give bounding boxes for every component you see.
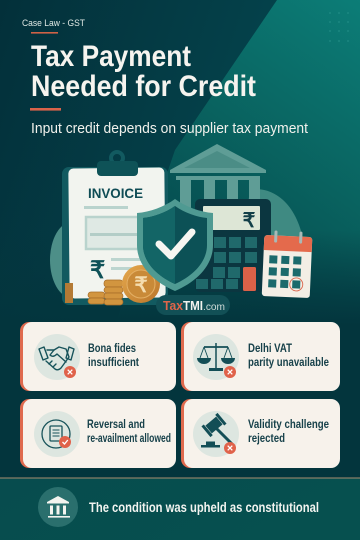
card: bona fides [20,322,176,391]
icon: clipboard invoice [62,152,168,305]
logo pill: TMI [183,299,203,313]
icon: calendar [262,230,313,298]
logo pill [156,295,230,315]
backdrop blobs [50,189,306,298]
title: Needed for Credit [31,70,256,103]
icon: clipboard invoice: ₹ [90,257,105,284]
icon: shield with check [137,199,213,291]
card text [248,419,329,445]
icon: clipboard invoice: INVOICE [88,186,143,201]
card text: re-availment allowed [87,433,171,445]
footer band [0,478,360,540]
card text: parity unavailable [248,357,329,369]
card text: Delhi VAT [248,343,292,355]
card text [87,419,171,445]
footer text: The condition was upheld as constitutional [89,500,319,515]
icon: gavel [193,411,239,457]
card text: Bona fides [88,343,136,355]
logo pill: .com [203,302,225,313]
card text: rejected [248,433,285,445]
card text: Reversal and [87,419,145,431]
subtitle: Input credit depends on supplier tax payment [31,120,309,137]
card text: insufficient [88,357,139,369]
logo pill: Tax [163,299,183,313]
icon: document cycle [34,411,80,457]
icon: scales [193,334,239,380]
card text [248,343,329,369]
card text [88,343,139,369]
icon: coin stacks: ₹ [134,274,148,297]
title [31,40,256,103]
eyebrow label: Case Law - GST [22,18,85,28]
icon: calculator: ₹ [243,210,256,232]
eyebrow accent line [31,32,58,34]
title: Tax Payment [31,40,191,73]
icon: handshake [34,334,80,380]
icon: coin stacks [65,265,160,305]
icon: courthouse [38,487,78,527]
card text: Validity challenge [248,419,329,431]
icon: calculator [195,199,271,292]
card: reversal [20,399,176,468]
card: validity [181,399,340,468]
card: delhi vat [181,322,340,391]
title accent line [30,108,61,111]
icon: bank building [170,144,266,210]
illustration [50,144,313,315]
